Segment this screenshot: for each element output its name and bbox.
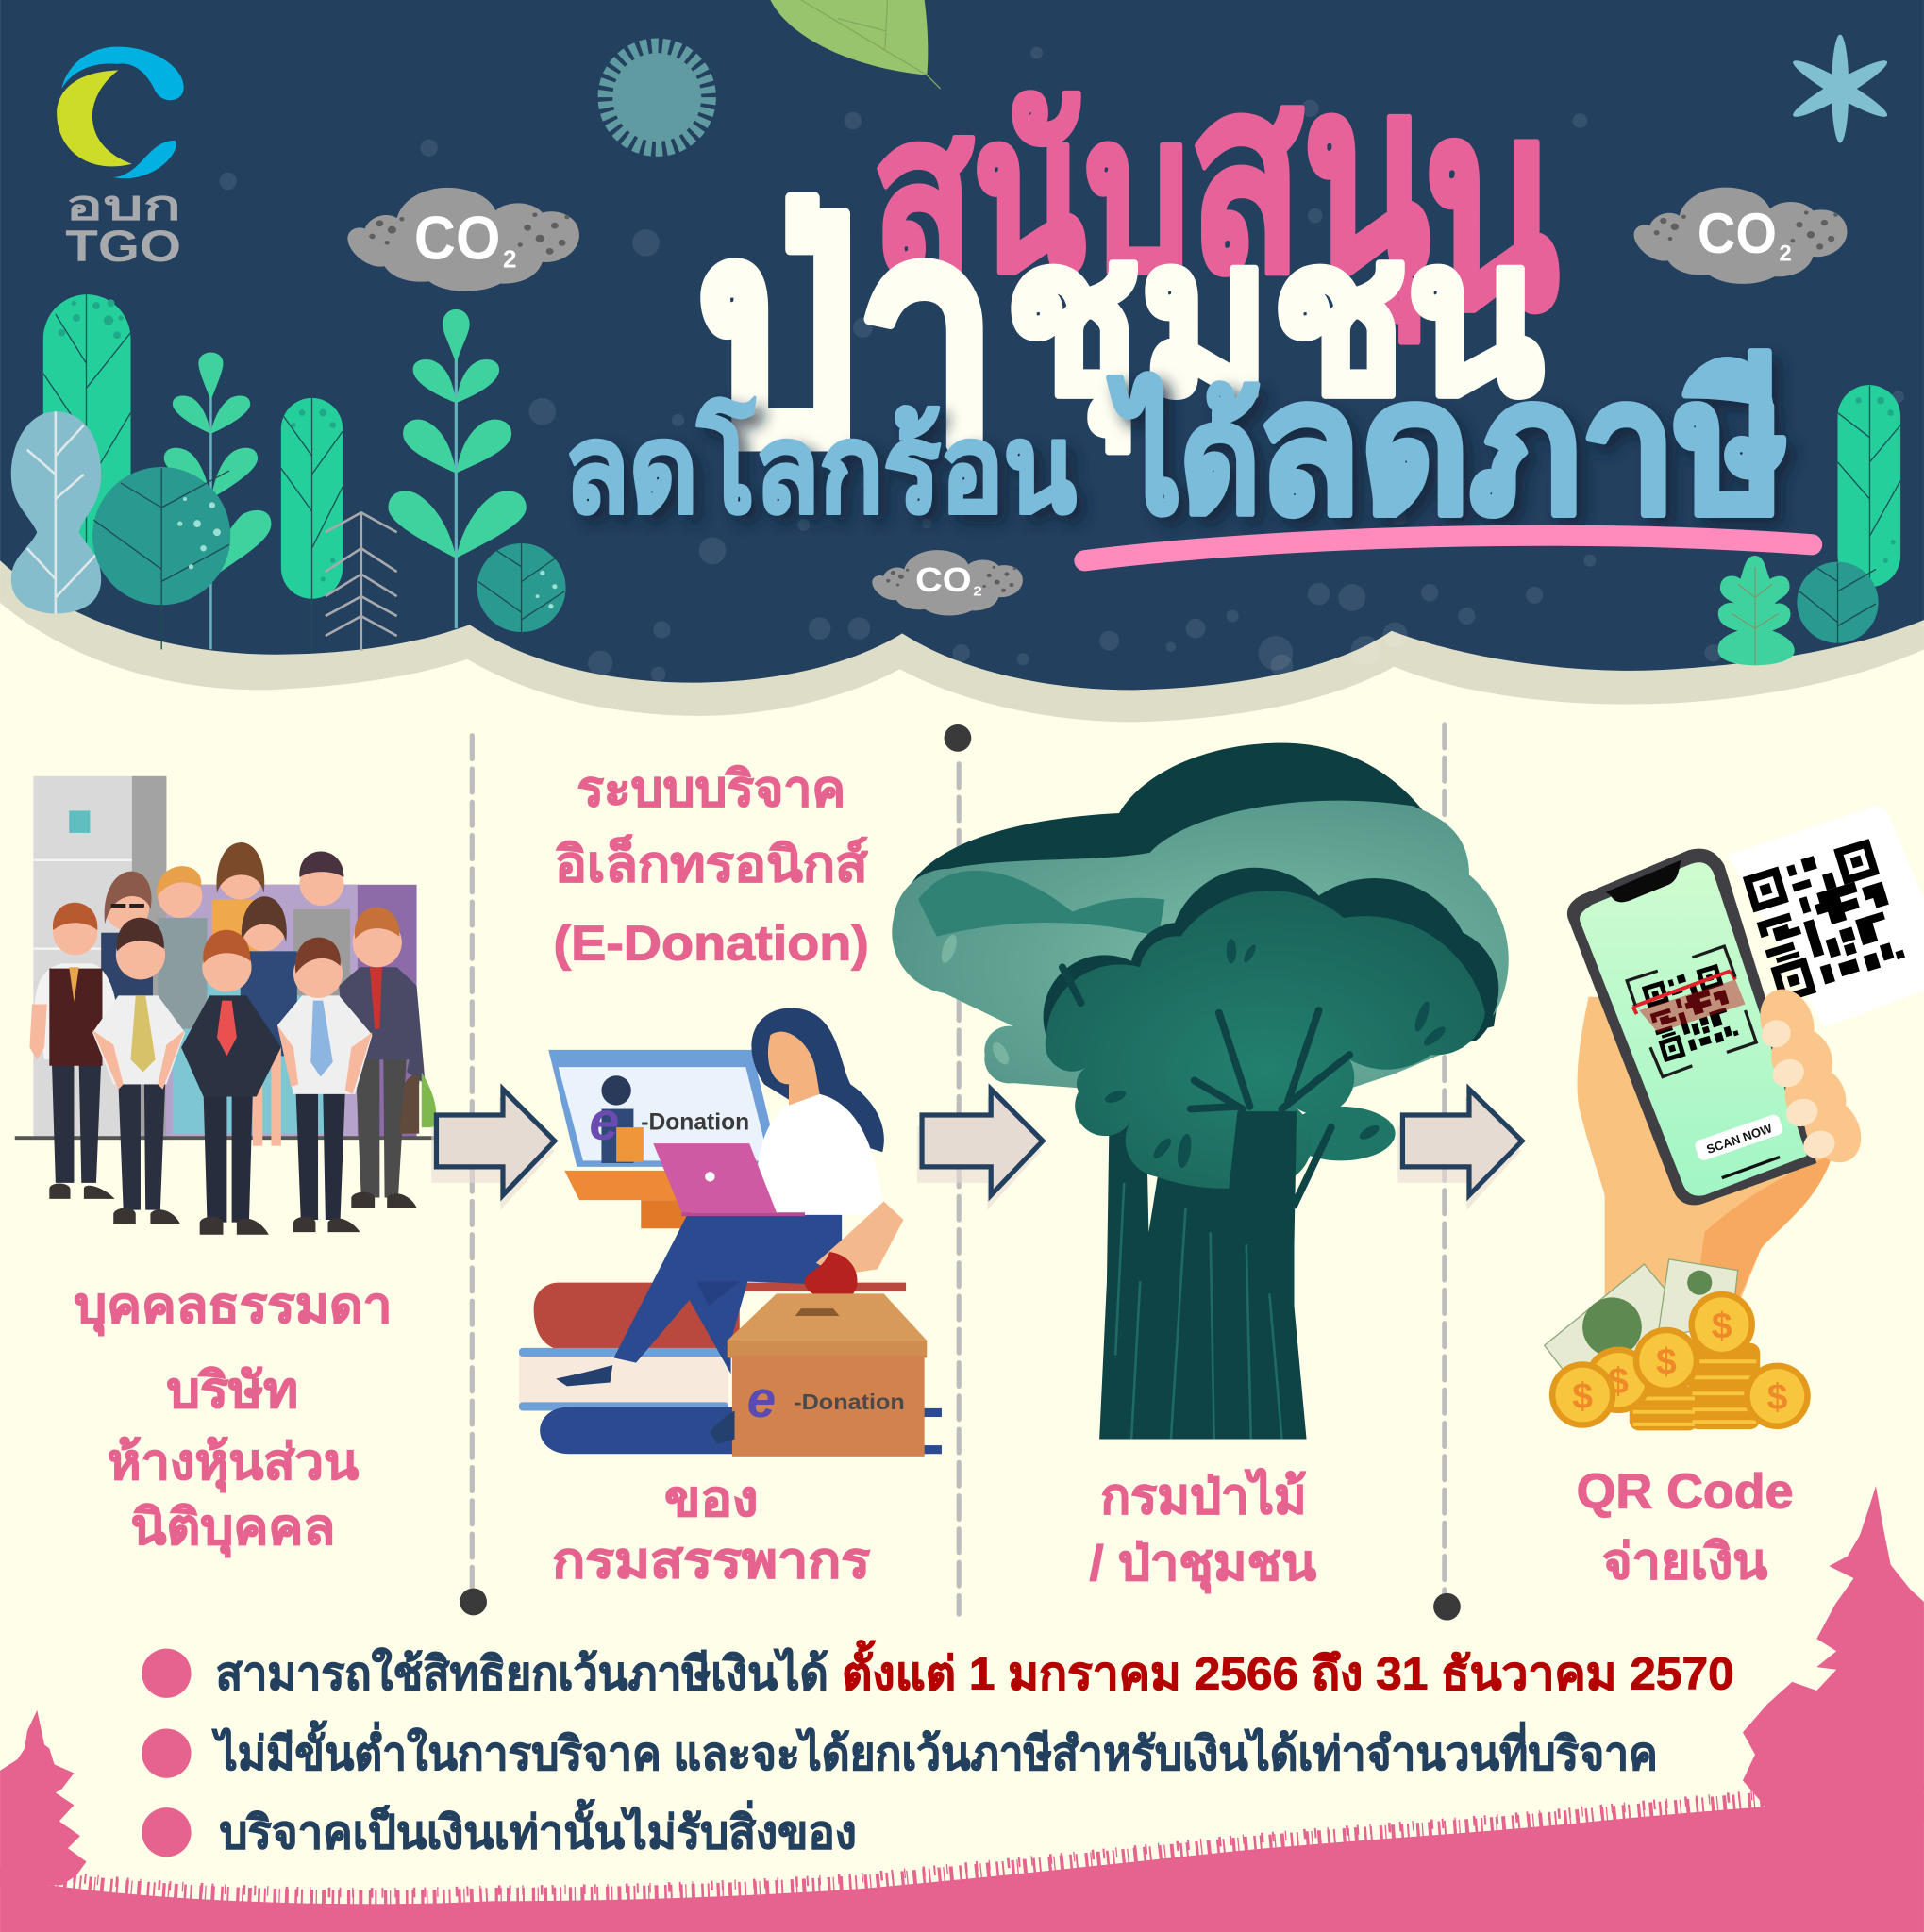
icon: CO2 cloud centre	[872, 550, 1023, 616]
tall green pill tree	[43, 294, 131, 616]
icon: CO2 cloud right: CO	[1698, 202, 1777, 265]
bullet 3: บริจาคเป็นเงินเท่านั้นไม่รับสิ่งของ	[220, 1799, 857, 1858]
title line 1: pink: สนับ	[873, 75, 1189, 315]
pale blue double blob tree	[11, 411, 101, 613]
icon: CO2 cloud left: 2	[503, 244, 517, 273]
caption: e-donation heading: อิเล็กทรอนิกส์	[555, 835, 868, 892]
hand palm	[1578, 997, 1832, 1306]
logo: TGO: TGO	[65, 221, 181, 271]
upper trunk and branches	[1223, 1111, 1297, 1244]
header panel: navy sky with scalloped edge	[0, 0, 1924, 722]
right pines	[1743, 1486, 1924, 1824]
title line 2: white: ป่า	[696, 163, 998, 508]
bullet 1	[142, 1641, 1734, 1700]
caption: left column: นิติบุคคล	[131, 1501, 335, 1558]
teal tree small	[477, 543, 566, 635]
icon: green leaf at top	[770, 0, 941, 89]
shirt	[757, 1094, 884, 1215]
icon: CO2 cloud centre: CO	[915, 561, 972, 599]
man with blue tie	[277, 938, 373, 1232]
books	[519, 1283, 942, 1454]
left pine	[0, 1710, 87, 1885]
monitor: e	[589, 1091, 619, 1152]
donation box: -Donation	[794, 1390, 905, 1414]
icon: CO2 cloud right: 2	[1779, 241, 1792, 266]
title line 3: blue: ได้	[1109, 374, 1260, 543]
arm and hand	[816, 1201, 903, 1275]
caption: left column	[74, 1278, 392, 1558]
side lobe	[1287, 1107, 1396, 1160]
lower trunks	[1099, 1115, 1307, 1440]
illustration: woman donating on books	[519, 1008, 942, 1457]
teal round tree	[92, 467, 230, 649]
caption: revenue department	[552, 1473, 870, 1589]
title line 1: pink: สนุ	[1189, 29, 1430, 343]
title line 2: white: ชุมชน	[1005, 197, 1543, 452]
face	[768, 1032, 820, 1106]
icon: snowflake	[1789, 35, 1891, 143]
banknotes	[1545, 1259, 1738, 1405]
foliage leaves	[1103, 939, 1448, 1169]
pink forest ground with grass and trees	[0, 1486, 1924, 1932]
coins	[1549, 1291, 1811, 1430]
back canopy dark	[906, 743, 1504, 1059]
logo: TGO	[57, 47, 184, 271]
legs	[614, 1214, 842, 1363]
right forest illustration	[1718, 385, 1900, 665]
caption: left column: บุคคลธรรมดา	[74, 1278, 392, 1336]
front canopy	[1046, 891, 1485, 1189]
man with suit at right	[339, 908, 436, 1208]
caption: left column: บริษัท	[166, 1364, 298, 1419]
QR card	[1727, 806, 1924, 1027]
front canopy cap	[1044, 868, 1498, 1047]
scan now button: SCAN NOW	[1704, 1121, 1775, 1157]
bullet 1: ตั้งแต่ 1 มกราคม 2566 ถึง 31 ธันวาคม 2570	[842, 1641, 1734, 1700]
left forest illustration	[11, 294, 566, 653]
caption: QR payment: จ่ายเงิน	[1602, 1535, 1767, 1590]
caption: e-donation heading	[554, 762, 869, 971]
title line 1: pink: น	[1424, 48, 1560, 367]
monitor	[548, 1050, 780, 1228]
scanned QR	[1642, 964, 1740, 1062]
illustration: big tree	[892, 743, 1509, 1440]
illustration: hand with phone and QR	[1545, 806, 1924, 1430]
caption: left column: ห้างหุ้นส่วน	[108, 1435, 359, 1492]
caption: forestry department: กรมป่าไม้	[1100, 1468, 1307, 1524]
heart	[805, 1252, 858, 1304]
logo: TGO: อบก	[65, 183, 181, 228]
man with yellow tie	[92, 918, 185, 1224]
caption: e-donation heading: (E-Donation)	[554, 916, 869, 971]
back canopy light	[892, 801, 1509, 1103]
green pill tree right	[1838, 385, 1900, 587]
caption: forestry department	[1090, 1468, 1316, 1593]
scan brackets	[1627, 946, 1756, 1077]
scan now button	[1694, 1113, 1784, 1162]
donation box: e	[747, 1370, 776, 1428]
illustration: group of people	[15, 776, 436, 1235]
arrow 2	[917, 1090, 1043, 1210]
dashed column dividers	[472, 724, 1445, 1614]
caption: e-donation heading: ระบบบริจาค	[577, 762, 845, 817]
oak leaf	[1718, 556, 1795, 665]
bokeh dots	[220, 47, 1904, 681]
bullet 2: ไม่มีขั้นต่ำในการบริจาค และจะได้ยกเว้นภาษีสำหรับเงินได้เท่าจำนวนที่บริจาค	[211, 1721, 1658, 1780]
title line 3: blue: ลดโลกร้อน	[564, 397, 1076, 538]
fingers	[1751, 981, 1872, 1173]
plant two	[389, 309, 527, 628]
caption: QR payment	[1577, 1465, 1793, 1590]
phone notch	[1606, 860, 1681, 902]
monitor: -Donation	[641, 1110, 749, 1136]
donation box	[728, 1293, 927, 1457]
man with vest	[29, 903, 116, 1199]
man with dark suit	[181, 930, 281, 1235]
building	[33, 776, 166, 1140]
teal tree right	[1797, 562, 1879, 643]
phone	[1567, 849, 1816, 1205]
icon: teal sunburst	[607, 47, 708, 148]
icon: CO2 cloud right	[1634, 188, 1847, 284]
green pill tree	[281, 398, 343, 653]
hair back	[751, 1008, 884, 1152]
title	[564, 29, 1812, 560]
back row	[101, 842, 350, 1146]
icon: CO2 cloud left	[347, 188, 579, 291]
arrow 1	[431, 1090, 555, 1210]
title line 2: white	[696, 163, 1543, 508]
shoe	[556, 1365, 612, 1386]
bullet 1: สามารถใช้สิทธิยกเว้นภาษีเงินได้	[216, 1647, 828, 1700]
title line 1: pink	[873, 29, 1560, 367]
caption: revenue department: ของ	[664, 1473, 758, 1527]
grey pine chevrons	[326, 512, 397, 651]
arrow 3	[1397, 1090, 1522, 1210]
laptop	[653, 1143, 777, 1212]
plant one	[164, 353, 271, 649]
caption: forestry department: / ป่าชุมชน	[1090, 1536, 1316, 1593]
title line 3: blue	[564, 344, 1787, 551]
underline	[1084, 536, 1812, 560]
caption: QR payment: QR Code	[1577, 1465, 1793, 1520]
caption: revenue department: กรมสรรพากร	[552, 1534, 870, 1589]
icon: CO2 cloud left: CO	[414, 203, 500, 272]
bullet list	[142, 1641, 1734, 1858]
title line 3: blue: ลดภาษี	[1257, 344, 1787, 551]
icon: CO2 cloud centre: 2	[973, 585, 982, 599]
